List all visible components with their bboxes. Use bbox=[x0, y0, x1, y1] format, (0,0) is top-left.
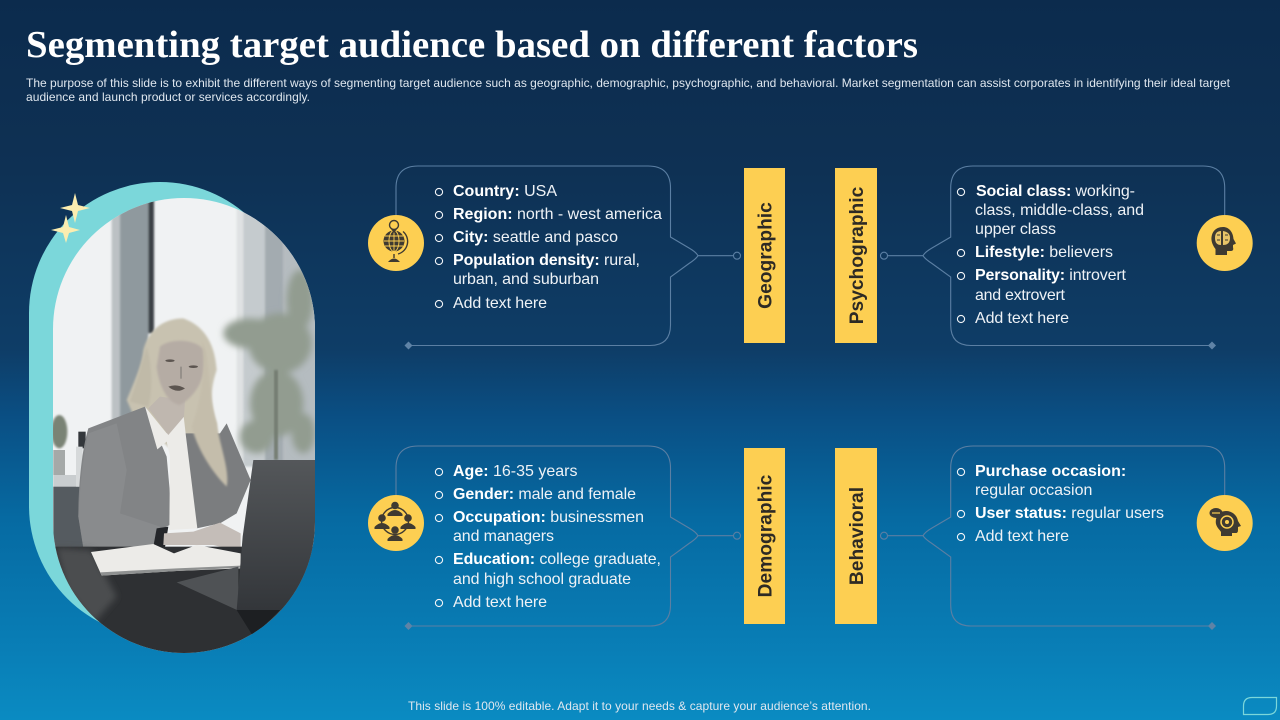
hand bbox=[163, 522, 241, 547]
text: psychographic details: class, middle-class, and bbox=[975, 202, 1144, 219]
text: psychographic details bbox=[975, 183, 1144, 327]
bar: Geographic bbox=[744, 168, 785, 343]
laptop base bbox=[177, 567, 238, 611]
subtitle description bbox=[26, 76, 1231, 104]
text: demographic details: Gender: male and female bbox=[453, 486, 636, 503]
teal backing shape bbox=[29, 182, 291, 637]
panel: psychographic bbox=[880, 166, 1225, 350]
icon: head with brain bbox=[1197, 215, 1253, 271]
icon: head with gear and speech bubble bbox=[1197, 495, 1253, 551]
text: demographic details: and managers bbox=[453, 528, 554, 545]
shirt bbox=[145, 407, 197, 530]
bullet markers bbox=[435, 468, 443, 607]
text: geographic details: Add text here bbox=[453, 295, 547, 312]
plant bbox=[223, 270, 315, 453]
text: geographic details bbox=[453, 183, 662, 312]
text: behavioral details bbox=[975, 463, 1164, 545]
text: behavioral details: Purchase occasion: bbox=[975, 463, 1126, 480]
bullet markers bbox=[957, 188, 965, 323]
text: demographic details: Occupation: businessmen bbox=[453, 509, 644, 526]
text: psychographic details: Add text here bbox=[975, 310, 1069, 327]
text: demographic details: Education: college graduate, bbox=[453, 551, 661, 568]
blazer right bbox=[185, 423, 251, 528]
bar: Psychographic: Psychographic bbox=[847, 186, 868, 324]
subtitle description: audience and launch product or services accordingly. bbox=[26, 90, 310, 104]
neck bbox=[148, 397, 185, 435]
text: geographic details: City: seattle and pasco bbox=[453, 229, 618, 246]
text: psychographic details: upper class bbox=[975, 221, 1056, 238]
text: geographic details: Region: north - west america bbox=[453, 206, 662, 223]
bullet markers bbox=[435, 188, 443, 308]
panel: behavioral bbox=[880, 446, 1225, 630]
bar: Geographic: Geographic bbox=[756, 202, 776, 309]
distant plant, ledge and cabinet bbox=[51, 415, 67, 448]
bar: Behavioral bbox=[835, 448, 877, 624]
text: psychographic details: Lifestyle: believers bbox=[975, 244, 1113, 261]
text: behavioral details: regular occasion bbox=[975, 482, 1092, 499]
text: geographic details: Population density: rural, bbox=[453, 252, 640, 269]
text: demographic details: Age: 16-35 years bbox=[453, 463, 578, 480]
cuff bbox=[153, 527, 168, 547]
face bbox=[157, 341, 205, 405]
text: demographic details bbox=[453, 463, 661, 611]
panel: demographic bbox=[396, 446, 740, 630]
text: demographic details: Add text here bbox=[453, 594, 547, 611]
notebook bbox=[91, 544, 241, 576]
text: geographic details: Country: USA bbox=[453, 183, 557, 200]
hair back bbox=[126, 317, 218, 448]
subtitle description: The purpose of this slide is to exhibit the different ways of segmenting target audience such as geographic, demographic, psychographic, and behavioral. Market segmentation can assist corporates in identifying their ideal target bbox=[26, 76, 1231, 90]
desk bbox=[53, 547, 320, 660]
text: demographic details: and high school graduate bbox=[453, 571, 631, 588]
corner badge outline bbox=[1244, 698, 1276, 714]
icon: people in a circle bbox=[368, 495, 424, 551]
text: psychographic details: Social class: working- bbox=[976, 183, 1135, 200]
sparkle stars bbox=[51, 193, 90, 243]
text: psychographic details: Personality: introvert bbox=[975, 267, 1127, 284]
text: psychographic details: and extrovert bbox=[975, 287, 1066, 304]
bar: Demographic bbox=[744, 448, 785, 624]
bar: Psychographic bbox=[835, 168, 877, 343]
icon: globe with location pin bbox=[368, 215, 424, 271]
hair strands bbox=[192, 340, 227, 487]
title: Segmenting target audience based on different factors bbox=[26, 24, 918, 66]
photo: woman at desk with laptop bbox=[50, 190, 320, 660]
footer note: This slide is 100% editable. Adapt it to your needs & capture your audience’s attention. bbox=[408, 699, 871, 713]
blazer left bbox=[78, 407, 173, 548]
laptop screen bbox=[237, 460, 320, 610]
bullet markers bbox=[957, 468, 965, 541]
sleeve highlight bbox=[78, 516, 81, 532]
text: behavioral details: Add text here bbox=[975, 528, 1069, 545]
text: geographic details: urban, and suburban bbox=[453, 271, 599, 288]
bar: Behavioral: Behavioral bbox=[847, 487, 868, 585]
text: behavioral details: User status: regular users bbox=[975, 505, 1164, 522]
bar: Demographic: Demographic bbox=[756, 474, 776, 597]
panel: geographic bbox=[396, 166, 740, 350]
